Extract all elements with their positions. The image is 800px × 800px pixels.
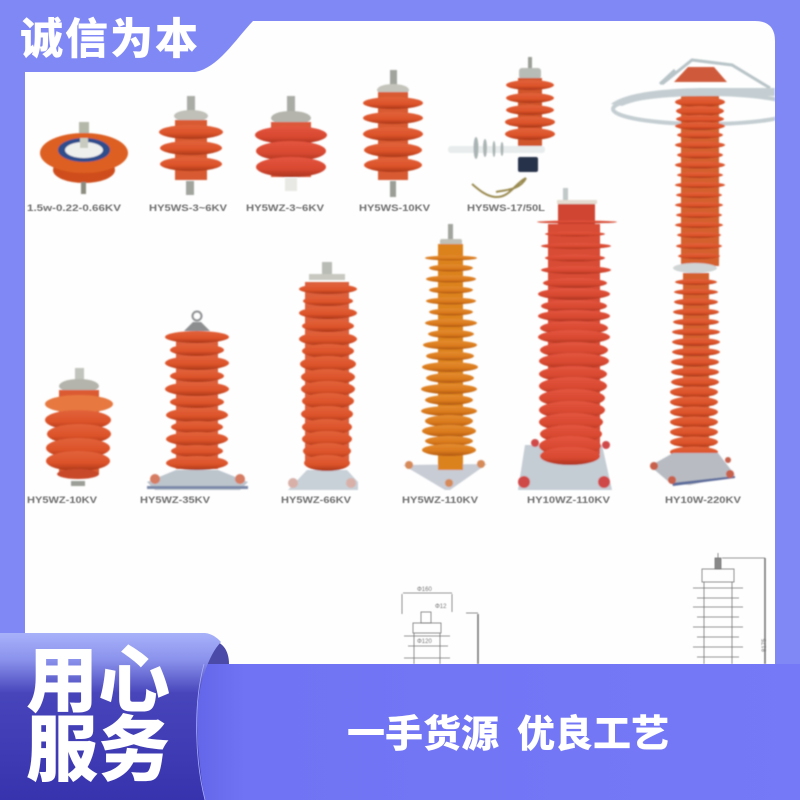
product model labels: HY5WZ-35KV (140, 495, 210, 505)
product model labels (27, 203, 741, 505)
fold of bottom ribbon (207, 640, 229, 664)
product model labels: HY5WS-10KV (359, 203, 430, 213)
dimension drawing: left (402, 587, 478, 664)
product: HY5WS-17/50L with bracket (448, 57, 555, 197)
ribbon title: attentive service: 服务 (26, 711, 170, 791)
product: HY5WZ-35KV (147, 312, 248, 490)
ribbon title: attentive service: 用心 (26, 642, 170, 722)
product model labels: HY5WZ-66KV (281, 495, 351, 505)
dimension drawing: left: Φ120 (417, 639, 432, 645)
product model labels: HY10WZ-110KV (527, 495, 610, 505)
heading: integrity: 诚信为本 (20, 16, 198, 64)
slogan (347, 714, 669, 756)
product model labels: HY10W-220KV (665, 495, 741, 505)
product: HY5WZ-3~6KV (255, 96, 327, 191)
white product panel (25, 21, 775, 665)
slogan: 优良工艺 (517, 714, 669, 756)
ribbon title: attentive service (26, 642, 170, 791)
dimension drawing: left: Φ160 (417, 587, 432, 593)
product: HY5WS-10KV (363, 70, 423, 197)
dimension drawing: left: Φ12 (435, 604, 447, 610)
bottom right band (197, 664, 800, 800)
product model labels: HY5WS-3~6KV (149, 203, 227, 213)
product: HY10W-220KV with grading ring (611, 60, 797, 486)
product: HY5WZ-10KV (45, 368, 113, 486)
product: HY5WS-3~6KV (159, 96, 223, 195)
product model labels: HY5WZ-110KV (402, 495, 478, 505)
product model labels: 1.5w-0.22-0.66KV (27, 203, 121, 213)
ribbon highlight edge (197, 664, 205, 800)
dimension drawing: right: 8175 (762, 638, 768, 652)
product: HY10WZ-110KV (518, 188, 617, 490)
slogan: 一手货源 (347, 714, 499, 756)
product: HY5WZ-66KV (288, 262, 358, 490)
dimension drawing: right (693, 553, 768, 664)
product photos (40, 57, 797, 490)
product model labels: HY5WZ-3~6KV (246, 203, 324, 213)
product model labels: HY5WZ-10KV (27, 495, 97, 505)
product model labels: HY5WS-17/50L (467, 203, 546, 213)
product: HY1.5W disc arrester (40, 122, 128, 194)
bottom left ribbon tab (0, 633, 221, 800)
product: HY5WZ-110KV (403, 224, 487, 490)
